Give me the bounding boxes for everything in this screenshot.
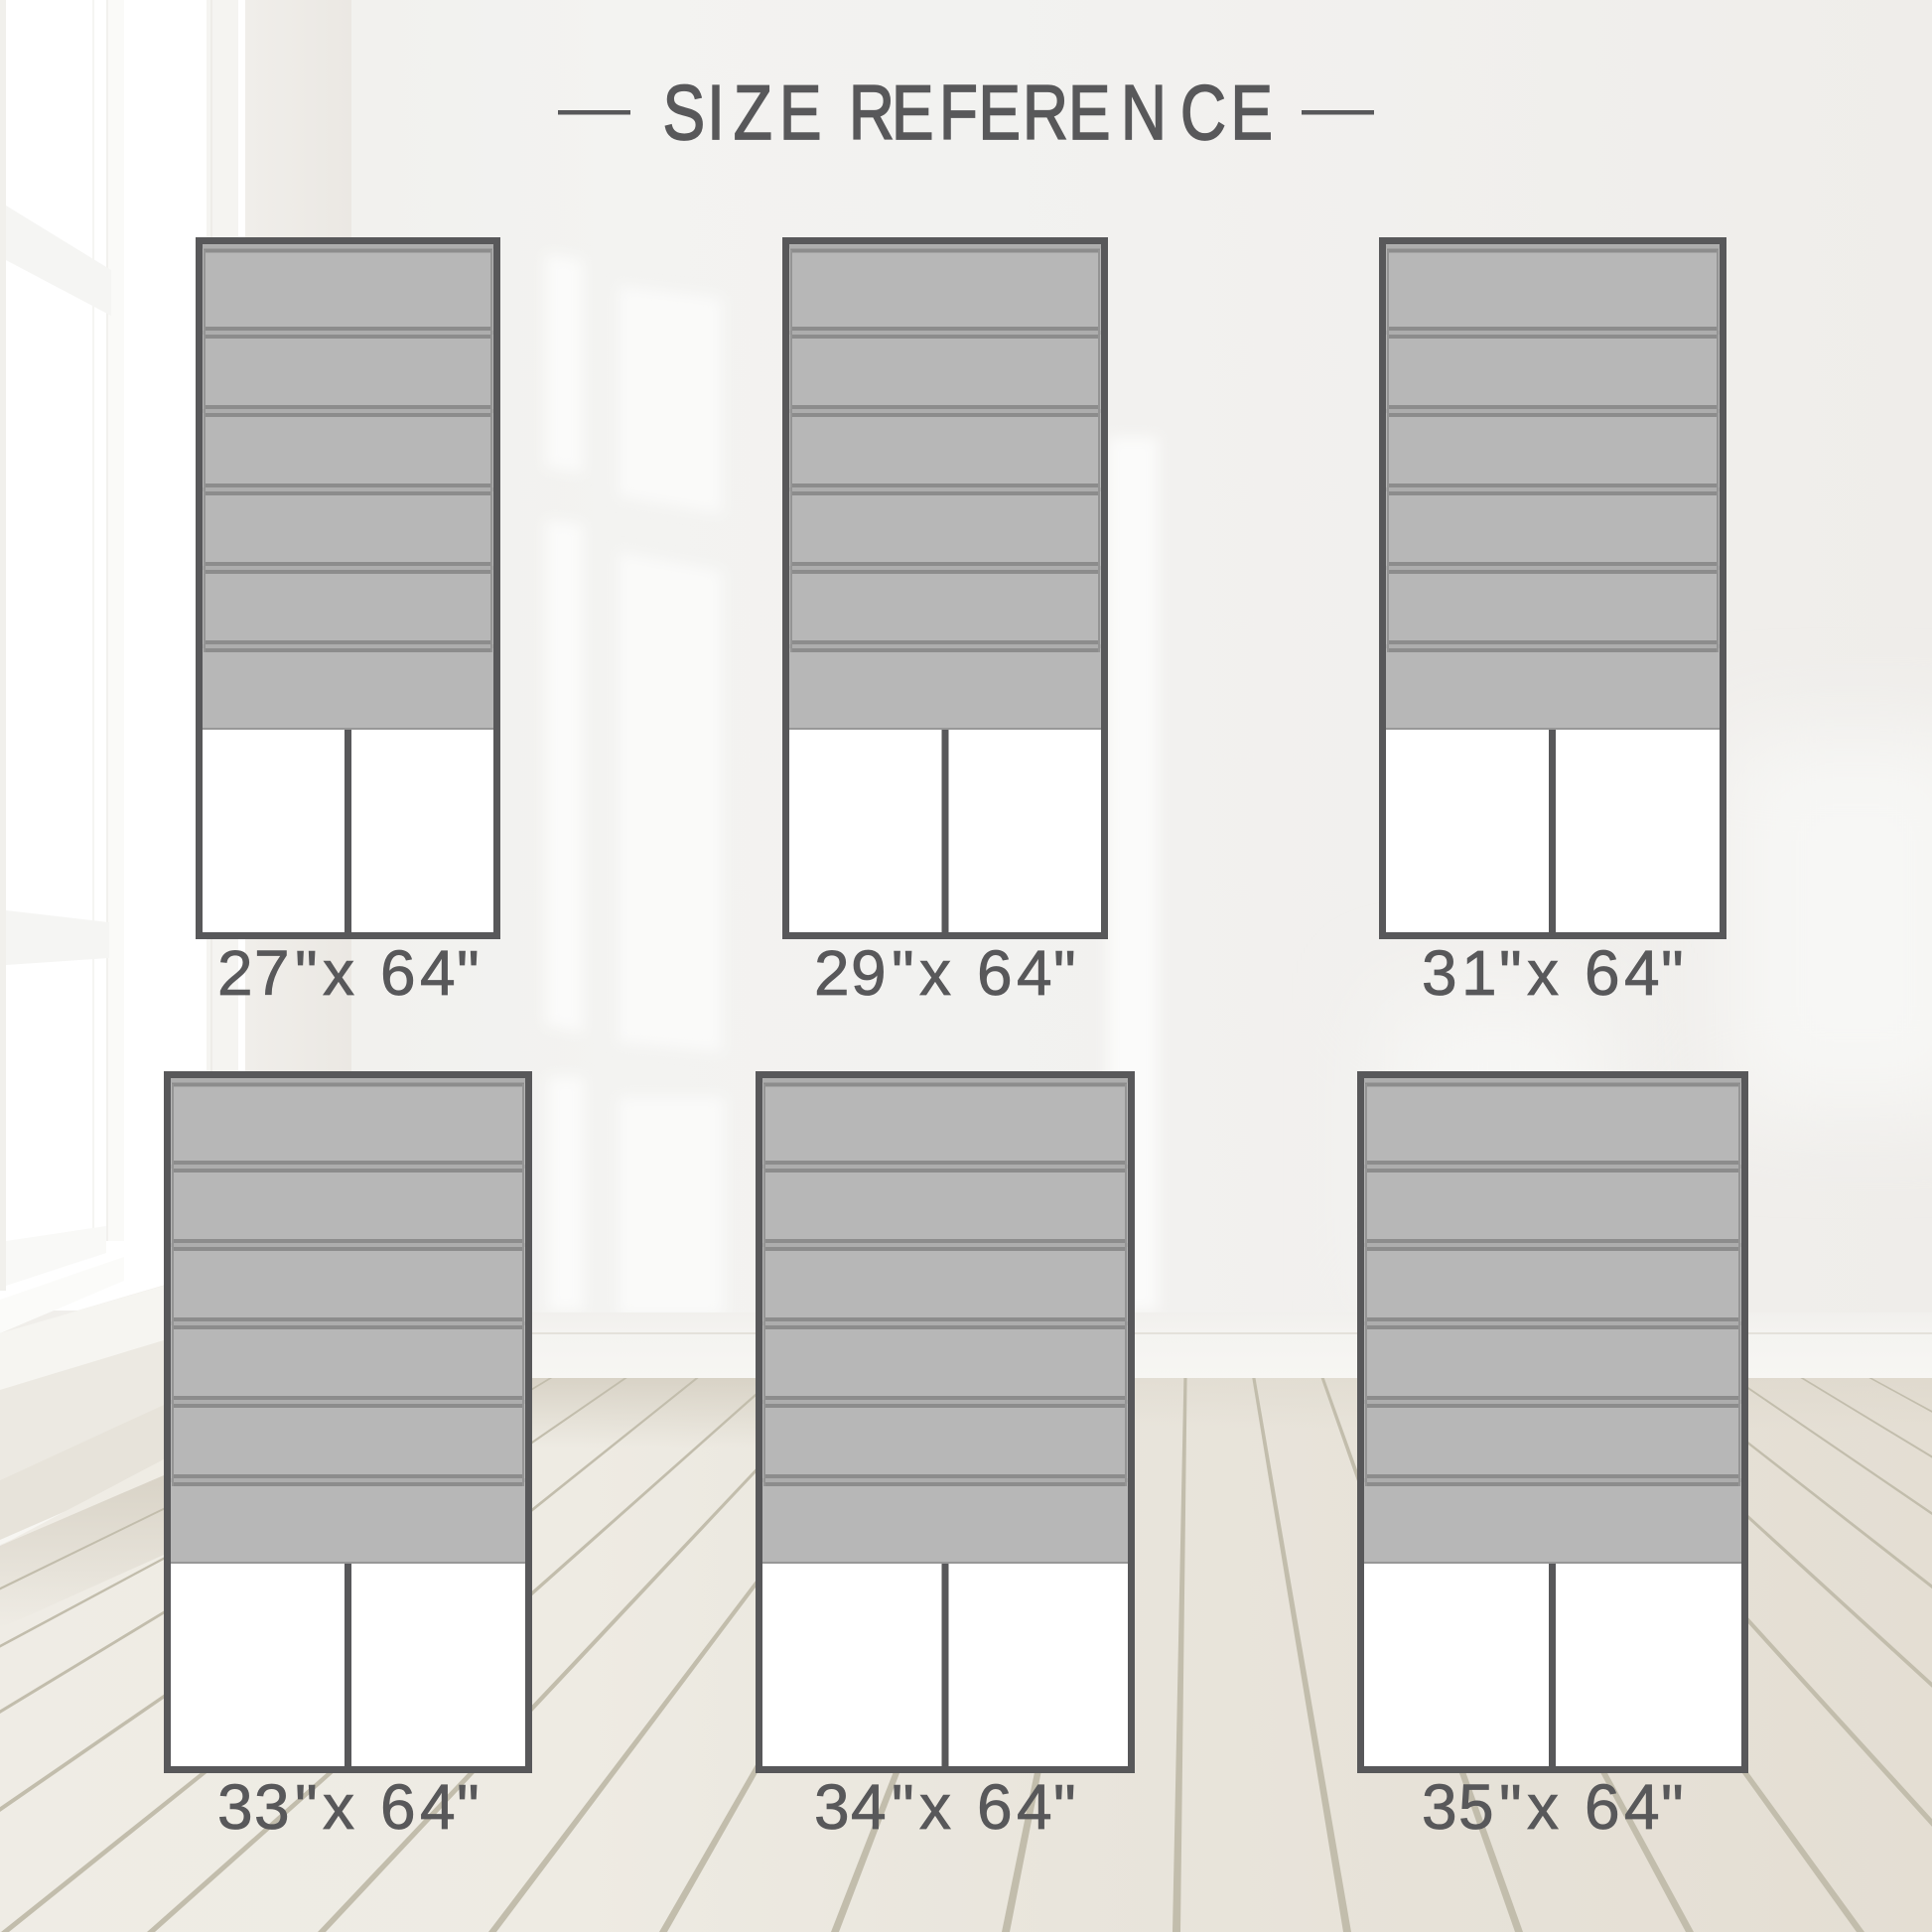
label: 31 x 64: 31"x 64" (1422, 937, 1684, 1009)
label: 34 x 64: 34"x 64" (814, 1771, 1076, 1843)
diagram: 27 inch shade (199, 240, 496, 935)
diagram: 31 inch shade (1382, 240, 1724, 935)
label: 29 x 64: 29"x 64" (814, 937, 1076, 1009)
title: SIZE REFERENCE (663, 69, 1273, 156)
diagram: 34 inch shade (759, 1074, 1132, 1769)
diagram: 33 inch shade (167, 1074, 528, 1769)
label: 33 x 64: 33"x 64" (217, 1771, 480, 1843)
diagram: 29 inch shade (786, 240, 1104, 935)
diagram: 35 inch shade (1360, 1074, 1745, 1769)
label: 27 x 64: 27"x 64" (217, 937, 480, 1009)
label: 35 x 64: 35"x 64" (1422, 1771, 1684, 1843)
